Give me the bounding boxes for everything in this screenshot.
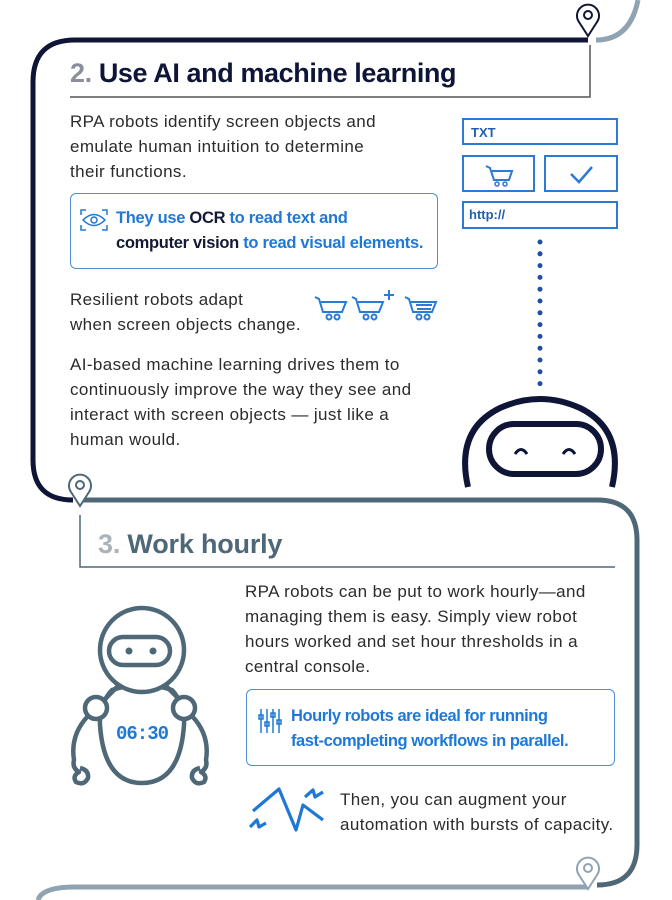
- text: bursts of capacity: Then, you can augment your: [340, 790, 567, 809]
- text: AI-based learning: [70, 355, 411, 449]
- text: resilient robots: [70, 290, 301, 334]
- text: bursts of capacity: automation with bursts of capacity.: [340, 815, 614, 834]
- callout: OCR: They use OCR to read text and: [116, 209, 348, 227]
- text: work hourly intro: central console.: [245, 657, 370, 676]
- icon: robot head peeking: [462, 396, 618, 488]
- callout: OCR: [70, 193, 438, 269]
- icon: sliders: [258, 709, 282, 733]
- text: AI-based learning: human would.: [70, 430, 181, 449]
- text: intro section 2: emulate human intuition to determine: [70, 137, 364, 156]
- text: work hourly intro: [245, 582, 586, 676]
- UI mockup boxes: [462, 118, 618, 229]
- text: intro section 2: RPA robots identify screen objects and: [70, 112, 376, 131]
- text: AI-based learning: continuously improve the way they see and: [70, 380, 411, 399]
- heading: section 3: 3. Work hourly: [98, 529, 282, 559]
- heading: section 2: 2. Use AI and machine learning: [70, 58, 456, 88]
- icon: lightning burst: [248, 787, 324, 832]
- text: intro section 2: their functions.: [70, 162, 187, 181]
- UI mockup boxes: http://: [469, 207, 505, 222]
- text: work hourly intro: RPA robots can be put to work hourly—and: [245, 582, 586, 601]
- icon: robot with clock: [71, 606, 209, 786]
- text: resilient robots: when screen objects change.: [70, 315, 301, 334]
- dotted connector: [538, 240, 542, 386]
- callout: OCR: computer vision to read visual elements.: [116, 234, 423, 252]
- text: resilient robots: Resilient robots adapt: [70, 290, 243, 309]
- icon: eye: [80, 209, 108, 231]
- icon: location pin top: [576, 4, 600, 38]
- callout: hourly robots: fast-completing workflows in parallel.: [291, 732, 568, 750]
- text: work hourly intro: hours worked and set hour thresholds in a: [245, 632, 578, 651]
- text: intro section 2: [70, 112, 376, 181]
- icon: location pin middle: [68, 474, 92, 508]
- callout: hourly robots: Hourly robots are ideal for running: [291, 707, 548, 725]
- icon: robot with clock: 06:30: [116, 723, 169, 745]
- text: bursts of capacity: [340, 790, 614, 834]
- callout: hourly robots: [246, 689, 615, 766]
- UI mockup boxes: TXT: [471, 125, 496, 140]
- icon: carts: [314, 290, 438, 320]
- icon: location pin bottom: [576, 856, 600, 891]
- text: work hourly intro: managing them is easy. Simply view robot: [245, 607, 577, 626]
- text: AI-based learning: interact with screen objects — just like a: [70, 405, 389, 424]
- text: AI-based learning: AI-based machine learning drives them to: [70, 355, 400, 374]
